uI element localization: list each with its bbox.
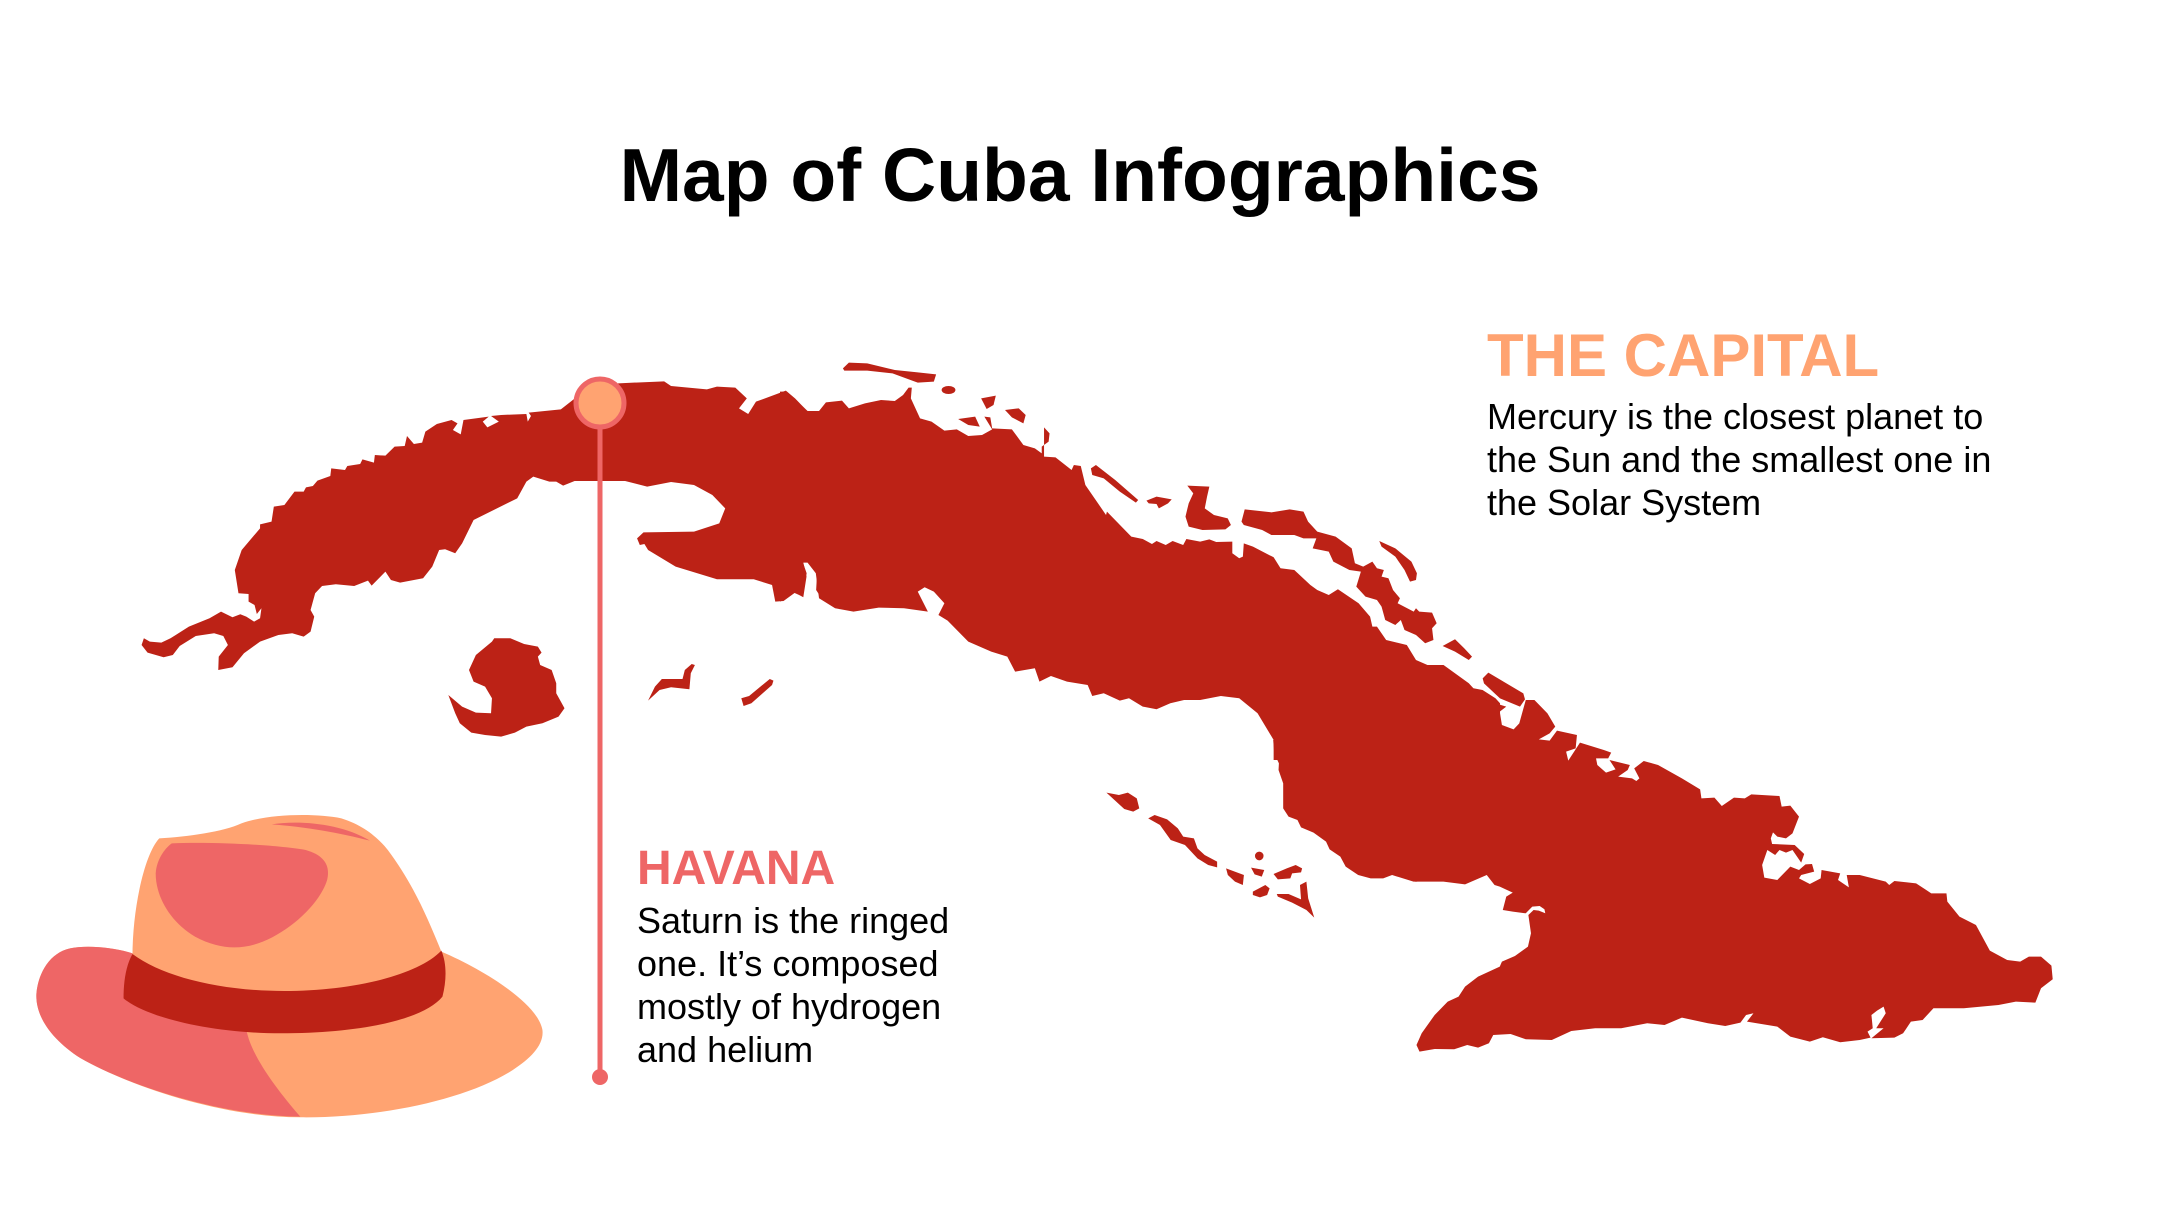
western Cuba: [142, 381, 840, 670]
islands: northern cays: [843, 363, 1472, 660]
island: northeastern cay: [1483, 673, 1525, 707]
text block: Havana: [637, 842, 949, 1070]
text block: the capital: the Solar System: [1487, 482, 1761, 523]
text block: the capital: THE CAPITAL: [1487, 322, 1879, 389]
islands: Isla de la Juventud and southwestern cays: [448, 638, 773, 737]
eastern Cuba: [1400, 700, 2053, 1052]
text block: the capital: the Sun and the smallest one in: [1487, 439, 1991, 480]
text block: Havana: Saturn is the ringed: [637, 900, 949, 941]
south-central Cuba: [1273, 740, 1417, 882]
title: Map of Cuba Infographics: [620, 133, 1540, 217]
text block: Havana: one. It’s composed: [637, 943, 939, 984]
text block: the capital: [1487, 322, 1991, 523]
map of Cuba: [142, 363, 2053, 1052]
text block: Havana: HAVANA: [637, 842, 835, 895]
text block: Havana: and helium: [637, 1029, 813, 1070]
text block: Havana: mostly of hydrogen: [637, 986, 941, 1027]
islands: Jardines de la Reina: [1106, 793, 1314, 918]
icon: fedora hat: [36, 815, 543, 1117]
central Cuba: [780, 388, 1500, 760]
Havana pin with leader line: [576, 379, 624, 1085]
text block: the capital: Mercury is the closest planet to: [1487, 396, 1983, 437]
